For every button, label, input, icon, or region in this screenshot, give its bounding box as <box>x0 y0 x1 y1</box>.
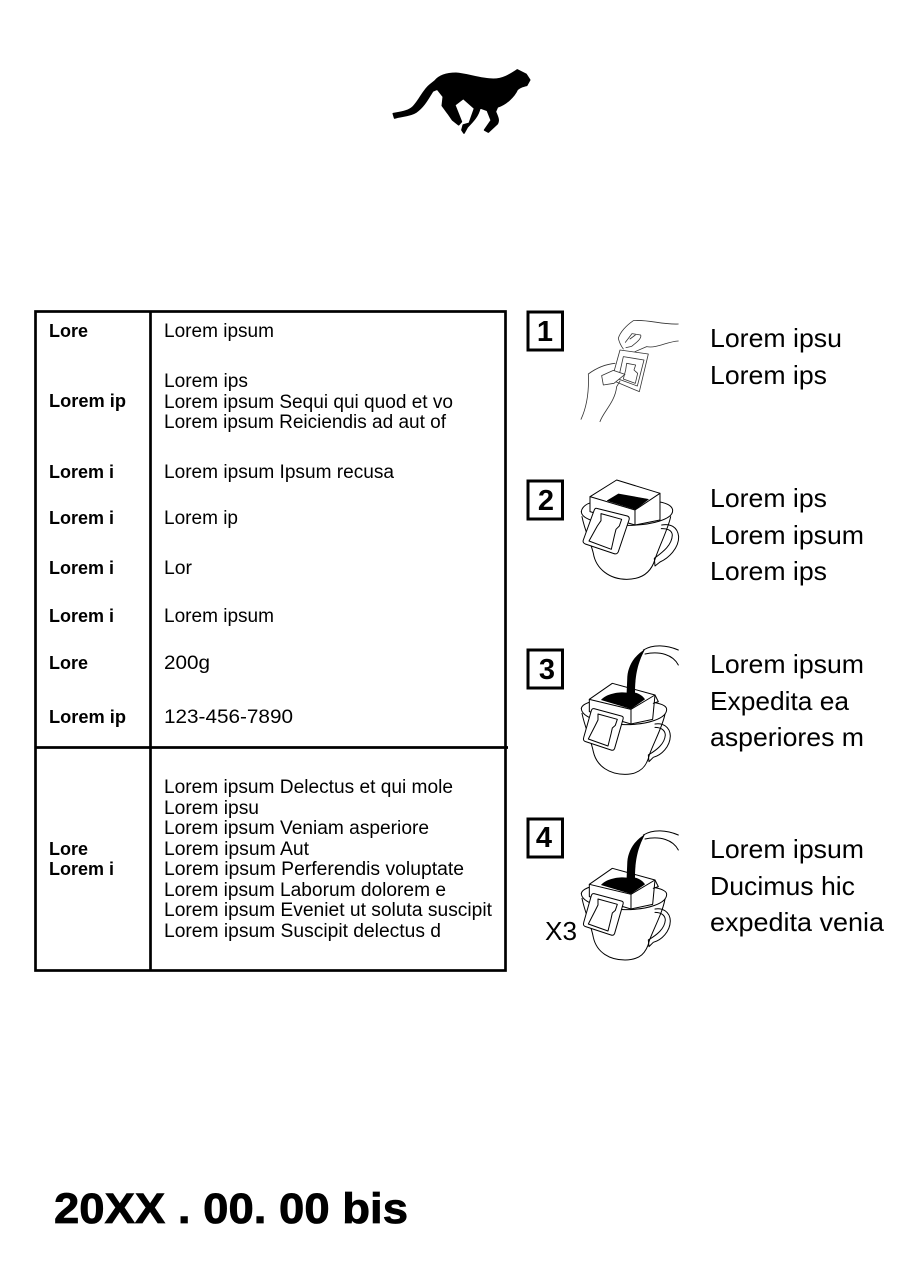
table row: first field: Lore <box>49 320 88 341</box>
step 3: instruction text: Lorem ipsum <box>710 649 864 679</box>
table row: long description: Lorem ipsu <box>164 798 259 819</box>
table row: long description <box>49 777 493 942</box>
table row: second field: Lorem ipsum Reiciendis ad aut of <box>164 412 447 433</box>
icon: pouring water into drip bag <box>581 646 678 774</box>
table row: first field: Lorem ipsum <box>164 321 274 342</box>
table row: second field <box>49 371 453 433</box>
step 3: instruction text: asperiores m <box>710 722 864 752</box>
step 3: instruction text: Expedita ea <box>710 686 850 716</box>
table row: long description: Lorem ipsum Delectus et qui mole <box>164 777 453 798</box>
table row: fifth field: Lorem i <box>49 557 114 578</box>
table row: phone number: Lorem ip <box>49 706 126 727</box>
step 2: number badge: 2 <box>538 485 554 517</box>
step 2: instruction text: Lorem ips <box>710 483 827 513</box>
repeat count label: X3 <box>545 916 577 946</box>
table row: second field: Lorem ipsum Sequi qui quod et vo <box>164 392 453 413</box>
table row: fifth field <box>49 557 193 579</box>
table row: long description: Lorem ipsum Eveniet ut soluta suscipit <box>164 900 493 921</box>
table row: fourth field: Lorem ip <box>164 508 238 529</box>
table row: weight: 200g <box>164 653 210 674</box>
step 3: number badge <box>528 650 562 688</box>
table row: fifth field: Lor <box>164 558 193 579</box>
step 4: number badge: 4 <box>536 822 552 854</box>
table row: third field <box>49 461 394 483</box>
table row: second field: Lorem ip <box>49 390 126 411</box>
table row: long description: Lorem ipsum Suscipit delectus d <box>164 921 441 942</box>
table row: long description: Lorem ipsum Laborum dolorem e <box>164 880 446 901</box>
table row: sixth field: Lorem ipsum <box>164 606 274 627</box>
table row: long description: Lorem ipsum Veniam asperiore <box>164 818 429 839</box>
icon: drip bag on mug <box>581 480 679 579</box>
table row: second field: Lorem ips <box>164 371 248 392</box>
table row: phone number: 123-456-7890 <box>164 707 293 728</box>
step 4: instruction text: expedita venia <box>710 907 885 937</box>
table row: sixth field <box>49 605 274 627</box>
footer date: 20XX . 00. 00 bis <box>54 1185 408 1233</box>
step 4: instruction text: Lorem ipsum <box>710 834 864 864</box>
step 3: number badge: 3 <box>539 654 555 686</box>
table row: weight: Lore <box>49 652 88 673</box>
table row: fourth field: Lorem i <box>49 507 114 528</box>
step 1: instruction text: Lorem ips <box>710 360 827 390</box>
table row: long description: Lorem i <box>49 858 114 879</box>
table row: phone number <box>49 706 293 728</box>
step 4: instruction text <box>710 834 885 937</box>
table row: long description: Lorem ipsum Aut <box>164 839 310 860</box>
table row: first field <box>49 320 274 342</box>
table row: fourth field <box>49 507 238 529</box>
step 2: number badge <box>528 481 562 519</box>
table row: long description: Lorem ipsum Perferendis voluptate <box>164 859 464 880</box>
step 3: instruction text <box>710 649 864 752</box>
step 1: instruction text <box>710 323 842 390</box>
table row: long description: Lore <box>49 838 88 859</box>
table row: third field: Lorem ipsum Ipsum recusa <box>164 462 394 483</box>
step 2: instruction text: Lorem ipsum <box>710 520 864 550</box>
table row: sixth field: Lorem i <box>49 605 114 626</box>
icon: repeat pouring water into drip bag <box>581 831 678 960</box>
table row: weight <box>49 652 210 674</box>
icon: hands opening the drip bag <box>581 320 678 422</box>
icon: running cheetah logo <box>393 70 530 133</box>
step 4: instruction text: Ducimus hic <box>710 871 855 901</box>
step 1: instruction text: Lorem ipsu <box>710 323 842 353</box>
step 2: instruction text <box>710 483 864 586</box>
step 2: instruction text: Lorem ips <box>710 556 827 586</box>
step 1: number badge: 1 <box>537 316 553 348</box>
table row: third field: Lorem i <box>49 461 114 482</box>
step 4: number badge <box>528 819 562 857</box>
step 1: number badge <box>528 312 562 350</box>
panel: product information table <box>35 311 508 971</box>
